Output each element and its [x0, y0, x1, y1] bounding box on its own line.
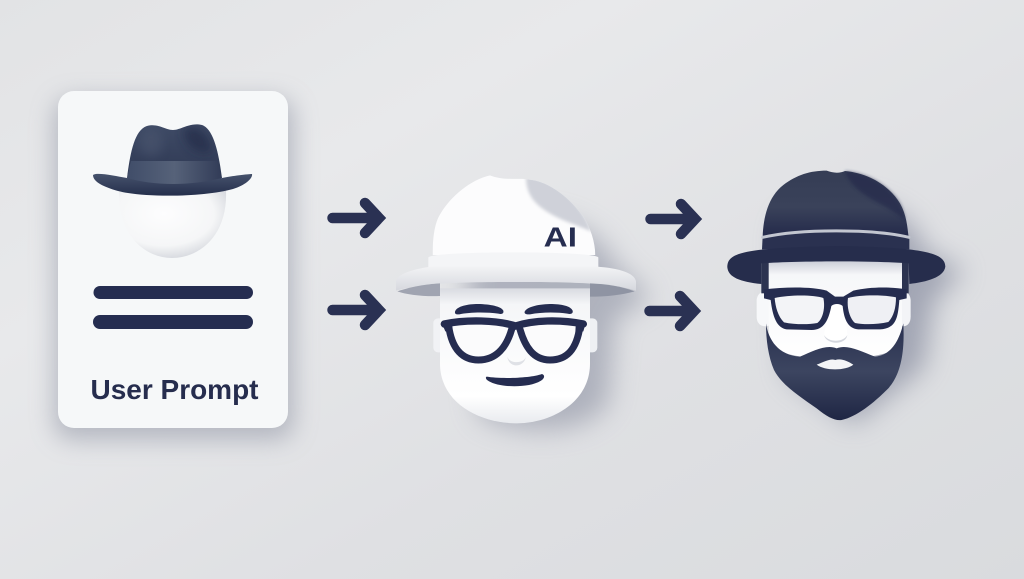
beard — [766, 323, 904, 420]
text lines — [93, 286, 253, 329]
label: User Prompt: User Prompt — [90, 374, 258, 405]
hat brim — [727, 246, 945, 284]
eyebrows — [455, 304, 573, 314]
hat side straps — [761, 260, 909, 293]
arrow: output bottom — [650, 296, 694, 326]
icon: blank head with dark fedora — [93, 124, 252, 258]
glasses — [441, 320, 586, 360]
icon: result head with dark hat and beard — [727, 171, 964, 424]
label: AI: AI — [544, 221, 577, 252]
arrow: output top — [650, 204, 695, 234]
icon: AI head with white hat — [396, 170, 652, 430]
shadow — [465, 216, 652, 430]
hat crown — [432, 176, 596, 255]
hat brim — [396, 267, 636, 291]
hat band — [762, 230, 909, 249]
face — [769, 260, 902, 359]
mouth — [817, 359, 853, 369]
arrow: input top — [332, 203, 379, 233]
hat band — [428, 252, 598, 268]
nose — [507, 357, 526, 365]
hat crown — [763, 171, 909, 237]
arrow: input bottom — [332, 295, 379, 325]
panel: user prompt card — [54, 91, 294, 440]
face — [440, 288, 590, 423]
mouth — [486, 374, 544, 386]
ears — [433, 318, 597, 352]
nose — [824, 303, 847, 342]
ears — [757, 291, 911, 326]
shadow — [781, 201, 964, 424]
glasses — [764, 287, 907, 330]
